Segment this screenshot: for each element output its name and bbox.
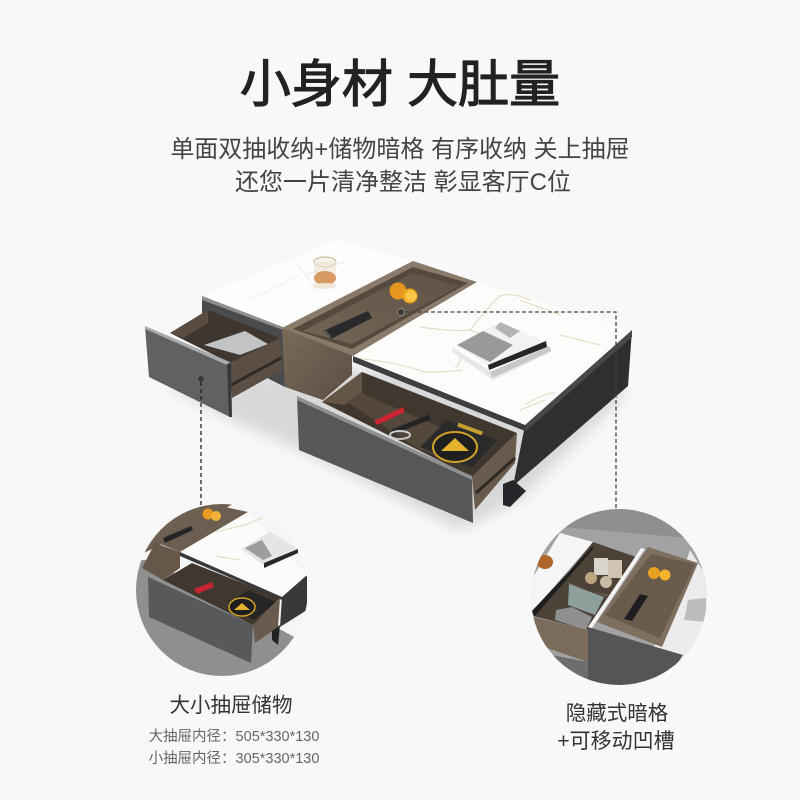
- glass tumbler: [314, 257, 336, 289]
- floor stone: [566, 509, 684, 538]
- caption: hidden compartment: +可移动凹槽: [557, 730, 675, 753]
- circle detail: hidden compartment: [531, 509, 707, 685]
- hidden compartment interior: [533, 542, 636, 630]
- main product: coffee table: [145, 240, 632, 530]
- carpet: [136, 560, 294, 676]
- caption: hidden compartment: 隐藏式暗格: [566, 702, 669, 725]
- black book with gold emblem: [420, 420, 497, 468]
- body side: [280, 575, 307, 627]
- wood tray top: [161, 507, 248, 552]
- marble: [180, 512, 248, 552]
- key ring: [390, 431, 410, 439]
- caption: drawers: 大抽屉内径：505*330*130: [149, 728, 319, 745]
- title: 小身材 大肚量: [240, 56, 560, 113]
- book: [241, 532, 298, 566]
- remote control: [323, 311, 372, 339]
- table leg: [503, 480, 526, 507]
- left connector: dashed line: [198, 376, 204, 515]
- pocket knife: [374, 407, 405, 425]
- caption: drawers: 大小抽屉储物: [170, 694, 292, 717]
- right connector: dashed line: [398, 308, 616, 508]
- caption: drawers: [149, 694, 319, 767]
- caption: drawers: 小抽屉内径：305*330*130: [149, 750, 319, 767]
- drawer front: [148, 577, 253, 663]
- stored magazines: [568, 584, 604, 615]
- oranges: [390, 282, 418, 304]
- left body under top: [202, 296, 285, 387]
- drawer side: [253, 598, 280, 643]
- sliding tray: [597, 547, 698, 647]
- wood front: [533, 617, 588, 662]
- book stack: [452, 322, 551, 380]
- right marble: [654, 550, 707, 662]
- carpet: [553, 655, 588, 680]
- subtitle text: [170, 136, 630, 196]
- big open drawer: [297, 372, 517, 523]
- caption: hidden compartment: [557, 702, 675, 753]
- marble panel: [531, 533, 593, 611]
- right body side: [513, 330, 632, 486]
- white strip: [588, 548, 645, 628]
- drawer interior: [163, 563, 280, 625]
- small boxes: [594, 558, 608, 575]
- wood front: [142, 543, 180, 580]
- small drawer: [145, 310, 282, 417]
- tray oranges: [648, 567, 660, 579]
- tray remote: [624, 594, 648, 621]
- right marble top: [353, 282, 632, 425]
- left marble top: [203, 240, 413, 327]
- circle detail: drawer: [136, 504, 307, 676]
- wood tray module: [282, 261, 477, 400]
- grey front: [588, 627, 683, 690]
- subtitle text: 单面双抽收纳+储物暗格 有序收纳 关上抽屉: [170, 136, 630, 163]
- floor shadow: [165, 370, 625, 530]
- subtitle text: 还您一片清净整洁 彰显客厅C位: [235, 169, 571, 196]
